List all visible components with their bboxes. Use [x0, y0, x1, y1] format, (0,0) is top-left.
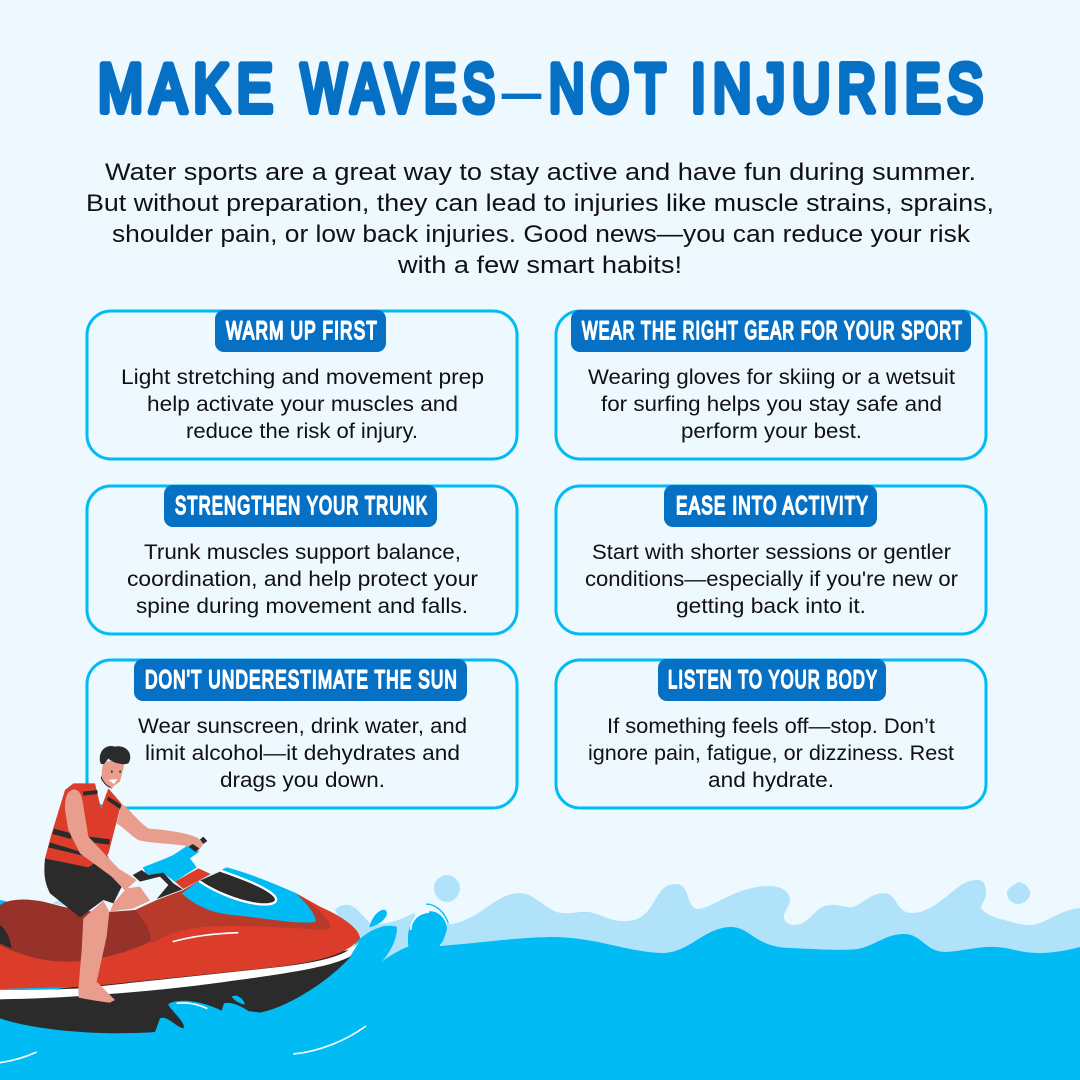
panel: ease into activity: Start with shorter sessions or gentler: [592, 541, 951, 564]
illustration: rider on jet ski: [0, 746, 459, 1063]
hull: [0, 950, 351, 1033]
panel: don't underestimate the sun: DON'T UNDERESTIMATE THE SUN: [145, 666, 458, 694]
vest straps: [48, 790, 122, 855]
rider front arm: [65, 789, 137, 891]
neck: [101, 773, 120, 789]
jet ski body: [0, 893, 360, 989]
title: MAKE: [98, 50, 280, 126]
panel: warm up first: reduce the risk of injury.: [186, 420, 418, 443]
panel: strengthen your trunk: spine during movement and falls.: [136, 595, 468, 618]
intro text block: [86, 159, 994, 279]
panel: listen to your body: [556, 659, 986, 808]
panel: listen to your body: and hydrate.: [708, 769, 834, 792]
hull stripe: [0, 942, 359, 999]
life vest: [45, 783, 121, 867]
jaw line: [101, 777, 111, 787]
handlebar console: [143, 845, 199, 882]
rider face: [102, 760, 125, 787]
hood: [182, 867, 316, 923]
seat: [0, 899, 151, 962]
title: WAVES: [301, 50, 501, 126]
windshield: [200, 871, 276, 904]
intro text block: But without preparation, they can lead to injuries like muscle strains, sprains,: [86, 190, 994, 217]
rider back arm: [117, 803, 204, 851]
rider leg and foot: [78, 901, 115, 1003]
panel: listen to your body: ignore pain, fatigue, or dizziness. Rest: [588, 742, 954, 765]
bow splash: [52, 876, 459, 997]
panel: listen to your body: If something feels off—stop. Don’t: [607, 715, 935, 738]
panel: warm up first: [87, 310, 517, 459]
panel: wear the right gear: Wearing gloves for skiing or a wetsuit: [588, 366, 955, 389]
title: NOT: [549, 50, 672, 126]
white highlights: [0, 933, 366, 1063]
rider hair: [100, 746, 130, 764]
panel: strengthen your trunk: Trunk muscles support balance,: [144, 541, 461, 564]
panel: don't underestimate the sun: Wear sunscreen, drink water, and: [138, 715, 467, 738]
intro text block: Water sports are a great way to stay active and have fun during summer.: [105, 159, 976, 186]
title: [98, 50, 990, 127]
panel: ease into activity: [556, 485, 986, 634]
panel: listen to your body: LISTEN TO YOUR BODY: [668, 666, 878, 694]
panel: warm up first: Light stretching and movement prep: [121, 366, 484, 389]
panel: don't underestimate the sun: [87, 659, 517, 808]
panel: ease into activity: getting back into it.: [676, 595, 866, 618]
panel: wear the right gear: perform your best.: [681, 420, 862, 443]
upper deck: [135, 880, 330, 943]
panel: ease into activity: conditions—especially if you're new or: [585, 568, 958, 591]
hull water drop: [232, 996, 245, 1005]
panel: don't underestimate the sun: drags you down.: [220, 769, 385, 792]
panel: warm up first: WARM UP FIRST: [226, 317, 378, 345]
panel: strengthen your trunk: STRENGTHEN YOUR TRUNK: [175, 492, 428, 520]
panel: warm up first: help activate your muscles and: [147, 393, 458, 416]
intro text block: shoulder pain, or low back injuries. Good news—you can reduce your risk: [112, 221, 971, 248]
water: [0, 900, 1080, 1080]
title: INJURIES: [691, 50, 990, 126]
title: —: [502, 53, 541, 127]
rider shorts: [44, 853, 123, 917]
panel: strengthen your trunk: [87, 485, 517, 634]
rider thigh: [110, 887, 150, 912]
panel: wear the right gear: for surfing helps you stay safe and: [601, 393, 942, 416]
panel: ease into activity: EASE INTO ACTIVITY: [676, 492, 869, 520]
rider smile: [108, 779, 117, 784]
intro text block: with a few smart habits!: [397, 252, 682, 279]
rider eyes: [111, 771, 121, 773]
panel: don't underestimate the sun: limit alcohol—it dehydrates and: [145, 742, 460, 765]
light background wave: [434, 875, 1080, 960]
panel: wear the right gear: [556, 310, 986, 459]
panel: strengthen your trunk: coordination, and help protect your: [127, 568, 478, 591]
